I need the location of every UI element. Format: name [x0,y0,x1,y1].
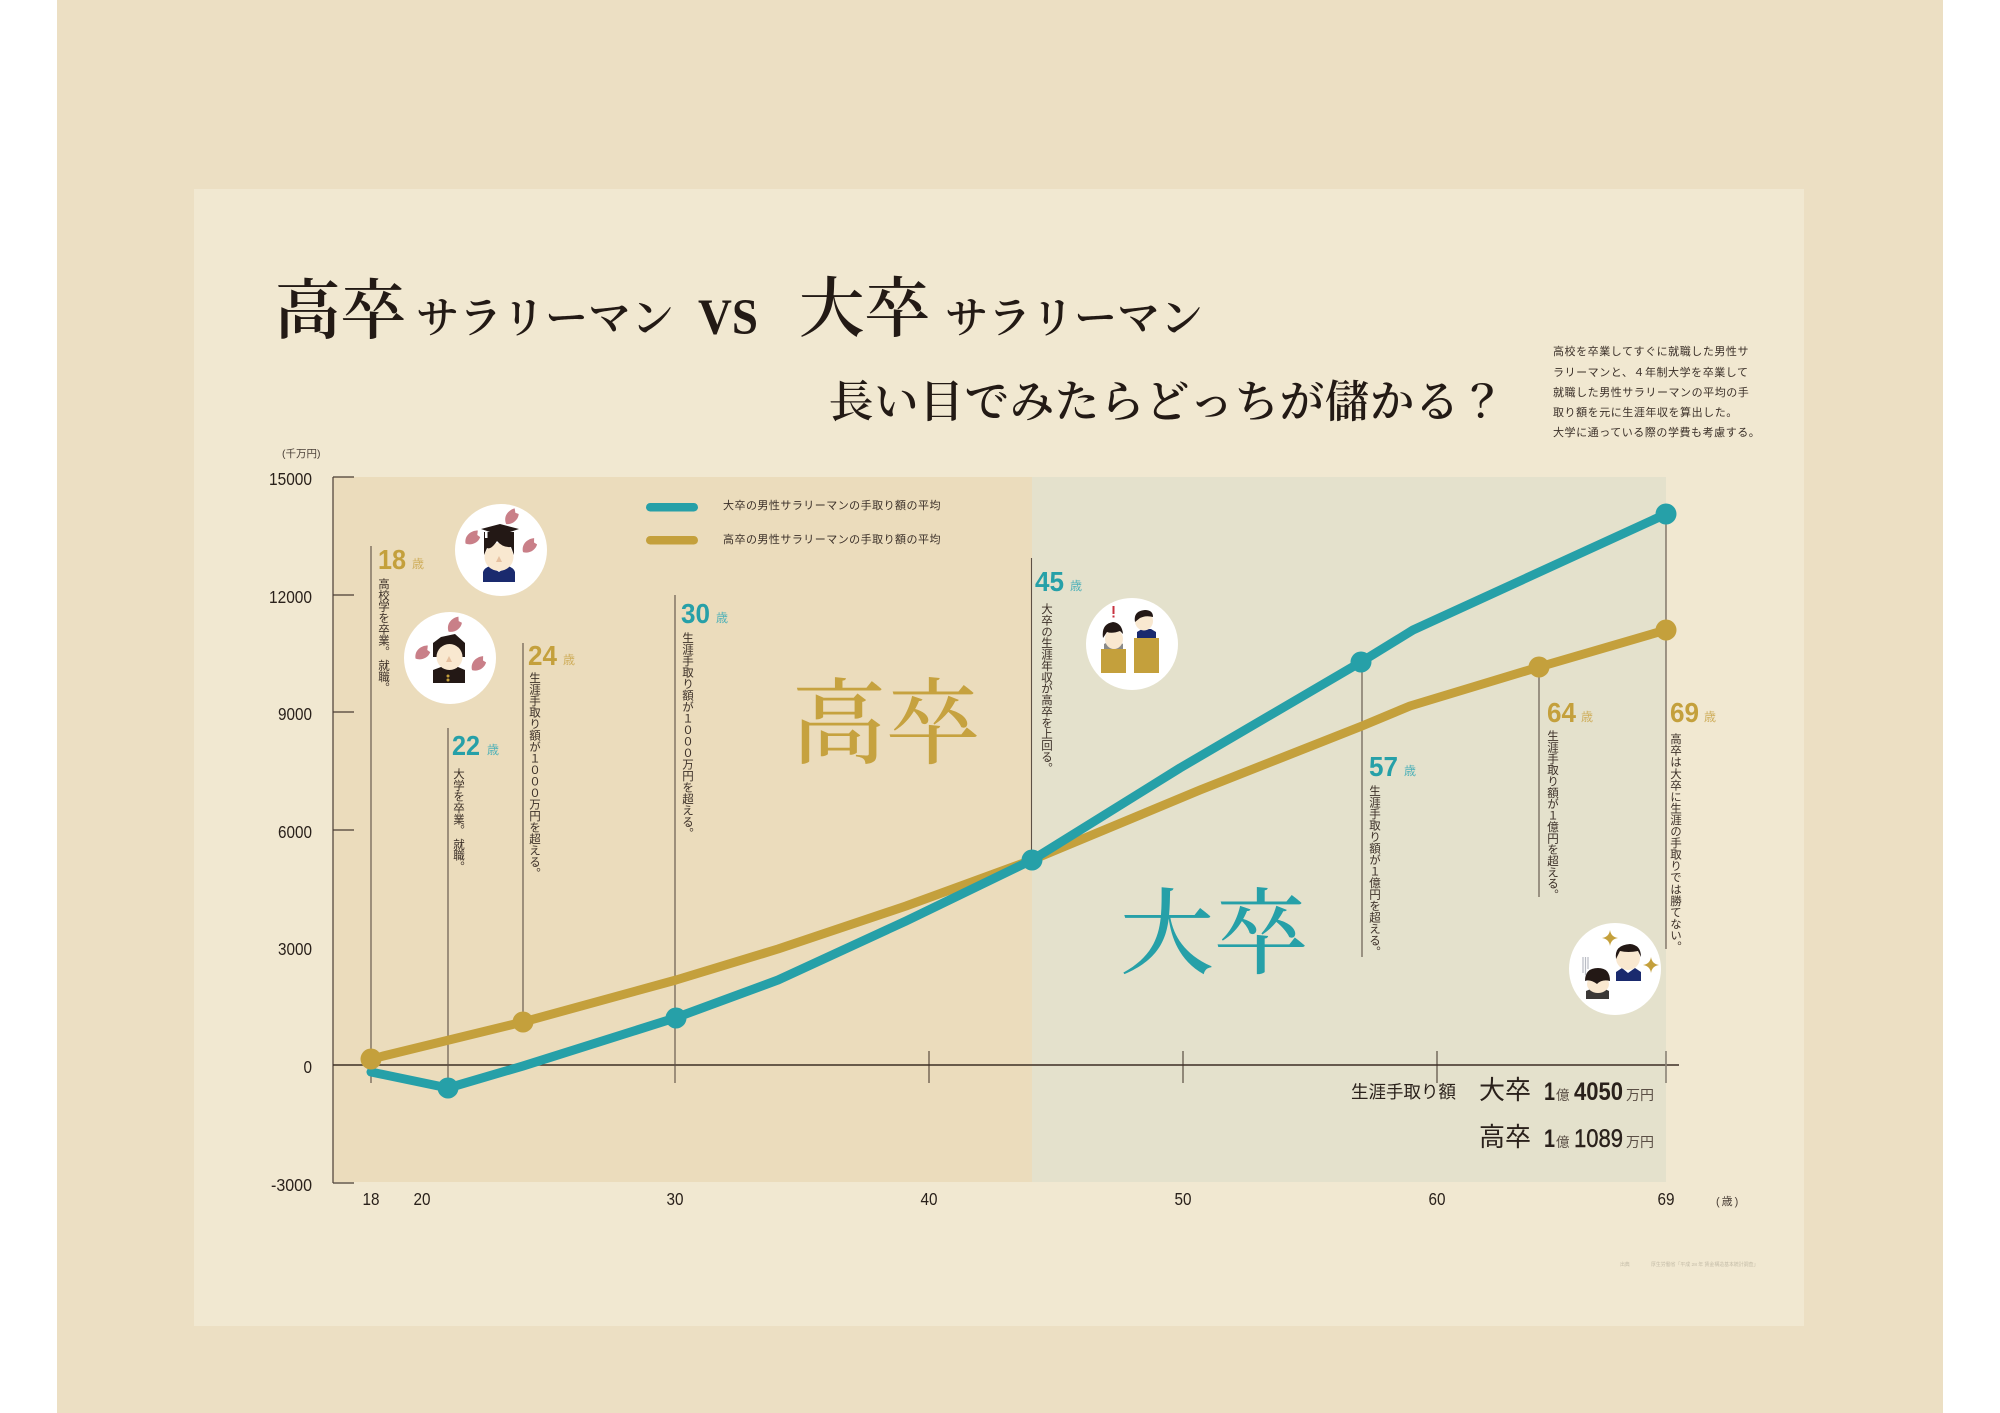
annotation: age 45: 大卒の生涯年収が高卒を上回る。 [1039,602,1055,774]
y axis labels: 15000 [269,469,312,489]
y axis labels: 3000 [278,939,312,959]
annotation: age 24: 歳 [563,651,575,668]
annotation: age 18 [376,544,424,693]
y axis labels [269,469,312,1195]
annotation: age 30: 30 [681,598,710,629]
y axis labels: -3000 [271,1175,312,1195]
annotation: age 69 [1668,697,1716,952]
chart background: university region [1032,477,1666,1182]
description text: 就職した男性サラリーマンの平均の手 [1553,385,1749,399]
source note: 出典 [1620,1261,1630,1268]
x axis labels: 40 [920,1189,938,1209]
region label: university: 大卒 [1120,858,1308,993]
chart: lifetime earnings [269,469,1740,1209]
title: first line: VS [698,290,758,346]
annotation: age 30: 歳 [716,609,728,626]
legend [646,498,941,546]
title: first line [275,256,1203,352]
annotation: age 22: 歳 [487,741,499,758]
icon: proud and dejected men [1569,923,1661,1015]
annotation: age 69: 69 [1670,697,1699,728]
source note [1620,1261,1758,1268]
annotation: age 24 [527,640,575,879]
annotation: age 30: 生涯手取り額が１０００万円を超える。 [680,631,696,839]
line: high school average [371,630,1666,1059]
markers: university [438,504,1676,1098]
title: first line: 高卒 [275,258,406,352]
summary: lifetime take-home totals: 1 [1544,1125,1555,1153]
annotation: age 30 [680,598,728,839]
annotation: age 57: 生涯手取り額が１億円を超える。 [1367,784,1383,958]
annotation leader lines [371,514,1666,1085]
title: first line: サラリーマン [945,285,1203,346]
x axis labels: 69 [1658,1189,1674,1209]
title: first line: 大卒 [799,256,930,350]
summary: lifetime take-home totals: 1089 [1574,1125,1623,1153]
line: university average [371,514,1666,1088]
annotation: age 57 [1367,751,1416,958]
annotation: age 22: 22 [452,730,480,761]
annotation: age 24: 24 [528,640,557,671]
summary: lifetime take-home totals: 万円 [1626,1087,1654,1103]
annotation: age 45: 歳 [1070,577,1082,594]
annotation: age 57: 57 [1369,751,1398,782]
summary: lifetime take-home totals [1351,1075,1654,1153]
annotation: age 45 [1035,566,1082,774]
summary: lifetime take-home totals: 4050 [1574,1078,1623,1106]
panel: main card [194,189,1804,1326]
annotation: age 45: 45 [1035,566,1064,597]
summary: lifetime take-home totals: 生涯手取り額 [1351,1082,1456,1102]
legend: 大卒の男性サラリーマンの手取り額の平均 [723,498,941,512]
description text: 取り額を元に生涯年収を算出した。 [1553,405,1738,419]
legend: 高卒の男性サラリーマンの手取り額の平均 [723,532,941,546]
icon: high school graduate [404,612,496,704]
annotation: age 64: 64 [1547,697,1576,728]
markers: high school [360,620,1676,1070]
annotation: age 69: 高卒は大卒に生涯の手取りでは勝てない。 [1668,733,1684,952]
icon: two men on podiums [1086,598,1178,690]
description text: 大学に通っている際の学費も考慮する。 [1553,425,1760,439]
y axis labels: 0 [304,1057,312,1077]
x axis unit: (歳) [1716,1195,1740,1208]
summary: lifetime take-home totals: 高卒 [1479,1122,1531,1152]
title: second line: 長い目でみたらどっちが儲かる？ [829,366,1505,430]
x axis line and ticks [333,1051,1679,1083]
x axis labels: 20 [414,1189,431,1209]
annotation: age 22: 大学を卒業。 就職。 [451,767,467,872]
annotation: age 24: 生涯手取り額が１０００万円を超える。 [527,671,543,879]
y axis labels: 9000 [278,704,312,724]
annotation: age 64: 生涯手取り額が１億円を超える。 [1545,729,1561,900]
x axis labels: 18 [362,1189,380,1209]
source note: 厚生労働省「平成 28 年 賃金構造基本統計調査」 [1651,1261,1758,1268]
summary: lifetime take-home totals: 億 [1556,1135,1570,1150]
description text: ラリーマンと、４年制大学を卒業して [1553,365,1749,379]
y axis with ticks [333,477,354,1183]
summary: lifetime take-home totals: 億 [1556,1088,1570,1103]
y axis labels: 6000 [278,822,312,842]
annotation: age 64 [1545,697,1593,900]
annotation: age 18: 高校学を卒業。 就職。 [376,578,392,693]
annotation: age 18: 歳 [412,555,424,572]
annotation: age 69: 歳 [1704,708,1716,725]
summary: lifetime take-home totals: 万円 [1626,1134,1654,1150]
y axis unit: (千万円) [282,448,320,460]
description text [1553,344,1760,439]
x axis labels: 30 [666,1189,684,1209]
annotation: age 18: 18 [378,544,406,575]
annotation: age 64: 歳 [1581,708,1593,725]
annotation: age 57: 歳 [1404,762,1416,779]
chart background: high school region [333,477,1032,1182]
description text: 高校を卒業してすぐに就職した男性サ [1553,344,1749,358]
title: first line: サラリーマン [416,285,674,346]
summary: lifetime take-home totals: 1 [1544,1078,1555,1106]
annotation: age 22 [451,730,499,872]
y axis labels: 12000 [269,587,312,607]
icon: university graduate [455,504,547,596]
x axis labels: 60 [1428,1189,1446,1209]
x axis labels: 50 [1174,1189,1192,1209]
summary: lifetime take-home totals: 大卒 [1479,1075,1531,1105]
region label: high school: 高卒 [792,648,980,783]
x axis labels [362,1189,1674,1209]
